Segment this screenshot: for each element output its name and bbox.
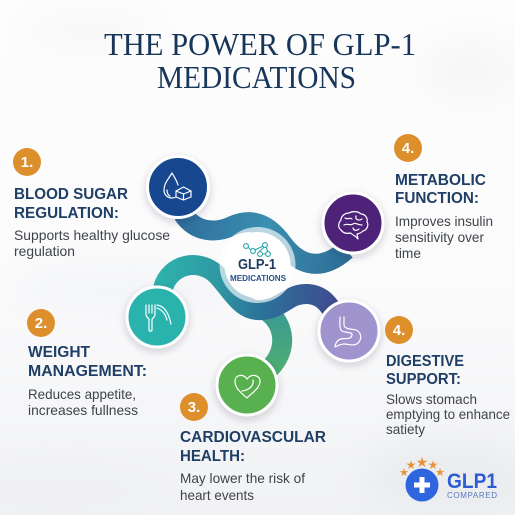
title: MEDICATIONS xyxy=(157,59,356,95)
block: metabolic function: time xyxy=(395,245,421,261)
logo: GLP1 Compared: GLP1 xyxy=(447,470,497,493)
block: metabolic function: 4. xyxy=(402,140,414,157)
title xyxy=(104,26,416,95)
block: cardiovascular health: 3. xyxy=(188,399,200,416)
block: digestive support xyxy=(385,316,510,437)
icon: stomach xyxy=(335,317,361,347)
block: blood sugar: regulation xyxy=(14,243,75,259)
hub label: GLP-1 xyxy=(238,257,276,273)
icon: stars xyxy=(399,455,445,479)
block: weight management xyxy=(27,309,147,418)
block: cardiovascular health: HEALTH: xyxy=(180,448,245,465)
icon: stars: ★ xyxy=(399,466,409,479)
block: blood sugar xyxy=(13,148,170,259)
center hub: MEDICATIONS xyxy=(230,274,287,283)
icon: brain xyxy=(339,212,368,239)
block: blood sugar: BLOOD SUGAR xyxy=(14,186,128,203)
connector ribbons xyxy=(163,214,346,368)
block: metabolic function: Improves insulin xyxy=(395,213,493,229)
logo: GLP1 Compared: COMPARED xyxy=(447,491,497,500)
block: blood sugar: REGULATION: xyxy=(14,205,119,222)
block: digestive support: emptying to enhance xyxy=(386,406,510,422)
node: brain xyxy=(323,193,383,253)
block: digestive support: Slows stomach xyxy=(386,391,477,407)
block: digestive support: DIGESTIVE xyxy=(386,353,464,370)
icon: stars: ★ xyxy=(406,458,416,472)
node: stomach xyxy=(319,301,379,361)
block: weight management: 2. xyxy=(35,315,47,332)
icon: molecule xyxy=(244,243,270,256)
block: weight management: WEIGHT xyxy=(28,344,91,361)
block: metabolic function: sensitivity over xyxy=(395,229,484,245)
block: blood sugar: 1. xyxy=(21,154,33,171)
node: blood sugar xyxy=(148,156,208,218)
block: weight management: Reduces appetite, xyxy=(28,386,136,402)
icon: drop and cube xyxy=(164,173,191,200)
block: cardiovascular health xyxy=(180,393,326,503)
block: metabolic function xyxy=(394,134,493,261)
icon: heart xyxy=(235,375,260,398)
node: heart xyxy=(217,355,277,415)
block: metabolic function: METABOLIC xyxy=(395,172,486,189)
node: fork xyxy=(127,287,187,347)
block: blood sugar: Supports healthy glucose xyxy=(14,227,170,243)
center hub xyxy=(220,227,296,303)
block: cardiovascular health: heart events xyxy=(180,487,254,503)
icon: stars: ★ xyxy=(416,455,428,471)
block: cardiovascular health: May lower the risk of xyxy=(180,470,305,486)
block: weight management: increases fullness xyxy=(28,402,138,418)
block: digestive support: 4. xyxy=(393,322,405,339)
icon: stars: ★ xyxy=(428,458,438,472)
title: THE POWER OF GLP-1 xyxy=(104,26,416,62)
block: digestive support: SUPPORT: xyxy=(386,371,461,388)
block: cardiovascular health: CARDIOVASCULAR xyxy=(180,429,326,446)
icon: fork and arc xyxy=(146,305,171,331)
icon: medical cross xyxy=(406,468,438,502)
block: digestive support: satiety xyxy=(386,421,425,437)
icon: stars: ★ xyxy=(435,466,445,479)
block: weight management: MANAGEMENT: xyxy=(28,363,147,380)
block: metabolic function: FUNCTION: xyxy=(395,190,479,207)
logo: GLP1 Compared xyxy=(399,455,497,502)
